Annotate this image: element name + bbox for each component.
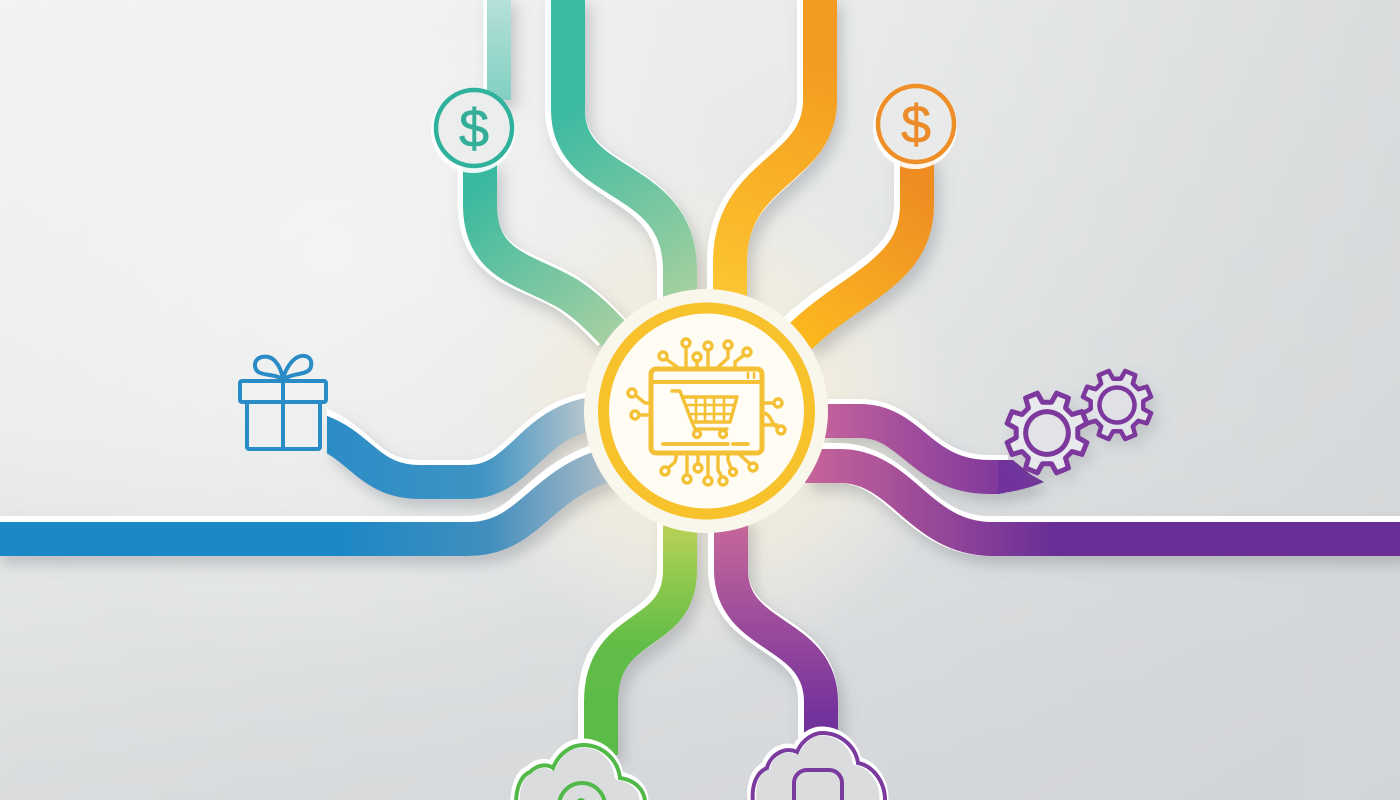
band: teal main from top to hub [565, 0, 680, 300]
icon: browser window with cart and circuit traces [628, 339, 785, 485]
icon: shopping cart [672, 391, 737, 438]
hub outer disc [584, 289, 828, 533]
band: green from hub to cloud [598, 515, 680, 755]
icon: teal dollar coin: $ [459, 99, 489, 159]
band: blue main from left edge to hub [0, 460, 612, 539]
hub: central circle with e-commerce icon [584, 289, 828, 533]
icon: orange dollar coin: $ [901, 95, 931, 155]
icon: green cloud with signal [515, 743, 645, 800]
band: teal from dollar icon to hub [477, 160, 617, 337]
band: purple main from hub to right edge [805, 463, 1400, 539]
icon: teal dollar coin [431, 89, 515, 173]
band: purple from hub to cloud [728, 515, 821, 740]
icon: small gear [1072, 360, 1162, 450]
browser frame [651, 369, 762, 453]
icon: orange dollar coin [873, 85, 957, 169]
icon: large gear [994, 380, 1100, 486]
band: blue from gift icon to hub [316, 411, 592, 482]
band: orange from dollar icon to hub [797, 155, 917, 337]
icon: purple cloud with device [752, 731, 885, 800]
band: pale teal top stub [497, 0, 499, 100]
band: orange main from top to hub [727, 0, 820, 300]
band: purple from hub to gears [820, 418, 1044, 494]
circuit traces [635, 347, 778, 477]
circuit nodes [628, 339, 785, 485]
icon: gift box [240, 356, 326, 449]
hub yellow ring [604, 308, 810, 514]
